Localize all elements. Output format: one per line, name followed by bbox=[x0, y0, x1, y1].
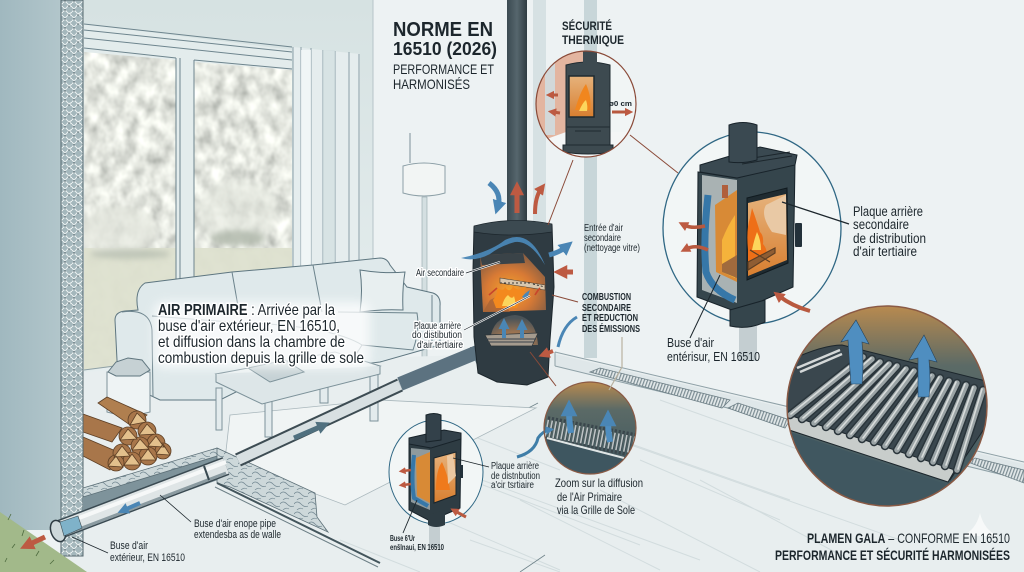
leader: émissions to small grate bbox=[609, 337, 622, 390]
title: 16510 (2026) bbox=[393, 39, 497, 59]
arrow: red inlet bbox=[562, 270, 573, 274]
rug bbox=[225, 400, 536, 505]
label: buse mini stove: Buse 6'Ur bbox=[390, 533, 415, 543]
curtain bbox=[293, 47, 360, 360]
arrow: hot air curve bbox=[535, 189, 541, 214]
grey pipe under stove bbox=[739, 326, 757, 361]
handle bbox=[795, 223, 802, 247]
window with garden bbox=[80, 24, 294, 380]
distance label: ø0 cm bbox=[609, 99, 632, 108]
pipe stub bbox=[729, 122, 757, 163]
floor bbox=[60, 352, 1024, 572]
ash chamber dome bbox=[490, 315, 538, 345]
text: air primaire: combustion depuis la grille de sole bbox=[158, 350, 364, 367]
panel: large stove cut-away inset bbox=[663, 122, 849, 361]
columns behind the stove bbox=[533, 0, 597, 358]
label: plaque arrière large inset: d'air tertiaire bbox=[853, 244, 917, 259]
panel: thermal safety inset bbox=[530, 50, 640, 160]
arrow: heat left 1 bbox=[551, 94, 558, 96]
label: combustion secondaire: DES ÉMISSIONS bbox=[582, 322, 640, 335]
front window bbox=[747, 188, 788, 280]
main stove bbox=[461, 220, 554, 385]
floor air pipe to stove bbox=[238, 347, 499, 460]
label: combustion secondaire bbox=[582, 291, 640, 335]
room back wall bbox=[82, 0, 373, 372]
top plate bbox=[700, 147, 797, 178]
label: air secondaire: Air secondaire bbox=[416, 268, 464, 279]
label: zoom grille de sole: de l'Air Primaire bbox=[557, 490, 622, 504]
arrow: air out 2 bbox=[686, 247, 708, 250]
arrow: inlet bbox=[779, 296, 810, 311]
title: HARMONISÉS bbox=[393, 76, 470, 92]
small arrow left bbox=[569, 410, 571, 433]
label: plaque mini stove bbox=[491, 461, 540, 491]
title bbox=[393, 19, 497, 92]
arrow: flue up bbox=[514, 190, 520, 213]
label: pipe: Buse d'air enope pipe bbox=[194, 518, 276, 530]
text: air primaire: et diffusion dans la chambre de bbox=[158, 334, 345, 351]
leader: buse bbox=[690, 275, 720, 338]
label: buse d'air large inset bbox=[667, 336, 760, 364]
panel: small grate zoom bbox=[517, 382, 640, 480]
label: zoom grille de sole: via la Grille de Sole bbox=[557, 503, 635, 517]
small arrow right bbox=[608, 420, 610, 442]
arrow: lower red bbox=[545, 351, 553, 354]
label: air secondaire bbox=[416, 262, 500, 279]
connector lines bbox=[530, 135, 678, 386]
title: PERFORMANCE ET bbox=[393, 61, 494, 77]
heading: thermal safety: SÉCURITÉ bbox=[562, 18, 612, 33]
label: buse d'air extérieur: Buse d'air bbox=[110, 540, 148, 552]
title: NORME EN bbox=[393, 19, 493, 41]
arrow: air down to stove bbox=[489, 183, 499, 206]
label: plaque arrière main stove: d'air tertiaire bbox=[417, 340, 463, 351]
label: plaque arrière large inset bbox=[853, 204, 926, 259]
label: plaque mini stove: Plaque arrière bbox=[491, 461, 539, 472]
leader: plaque bbox=[782, 202, 849, 224]
sole grate bbox=[485, 333, 538, 346]
arrow: mini inlet bbox=[455, 511, 466, 517]
text: air primaire: buse d'air extérieur, EN 16510, bbox=[158, 318, 340, 335]
arrow: flow in floor pipe bbox=[294, 426, 322, 438]
heading: thermal safety: THERMIQUE bbox=[562, 33, 624, 47]
label: plaque arrière large inset: secondaire bbox=[853, 217, 909, 232]
arrow: heat left 2 bbox=[553, 112, 560, 113]
flue pipe bbox=[507, 0, 527, 226]
label: plaque arrière main stove: Plaque arrière bbox=[414, 321, 461, 332]
text: air primaire bbox=[154, 302, 370, 368]
arrow: mini out 1 bbox=[403, 470, 411, 471]
label: plaque arrière large inset: de distribution bbox=[853, 231, 926, 246]
label: buse d'air large inset: Buse d'air bbox=[667, 336, 714, 350]
flames bbox=[493, 286, 526, 308]
label: zoom grille de sole: Zoom sur la diffusion bbox=[555, 476, 643, 490]
secondary air swoop bbox=[461, 237, 545, 265]
label: pipe: extendesba as de walle bbox=[194, 529, 281, 541]
label: plaque mini stove: a'cir tsrtiaire bbox=[491, 480, 534, 491]
exterior wall bbox=[0, 0, 61, 530]
panel: large grate zoom bbox=[780, 306, 990, 520]
side cut-away bbox=[702, 175, 737, 303]
basket of stones bbox=[107, 358, 150, 415]
footer caption bbox=[775, 530, 1010, 563]
label: buse d'air large inset: entérisur, EN 16510 bbox=[667, 350, 760, 364]
label: buse mini stove: enšlnaui, EN 16510 bbox=[390, 542, 444, 552]
label: pipe bbox=[160, 495, 281, 541]
mini leaders bbox=[403, 458, 489, 533]
floor trench cut-away bbox=[83, 448, 380, 567]
side inlet arrow bbox=[517, 430, 549, 457]
firebox bbox=[480, 253, 546, 312]
text: air primaire: AIR PRIMAIRE : Arrivée par la bbox=[158, 302, 335, 319]
label: entrée d'air secondaire bbox=[584, 223, 640, 254]
label: zoom grille de sole bbox=[555, 476, 643, 517]
air arrow up right bbox=[520, 326, 524, 338]
big arrow left bbox=[841, 320, 869, 384]
arrow: secondary inlet blue bbox=[549, 247, 566, 255]
floor lamp bbox=[403, 133, 445, 360]
underground air pipe bbox=[48, 462, 226, 544]
flames bbox=[747, 208, 767, 262]
label: entrée d'air secondaire: (nettoyage vitre) bbox=[584, 243, 640, 254]
collar bbox=[730, 300, 765, 327]
heading: thermal safety bbox=[562, 18, 624, 47]
firewood stack bbox=[83, 397, 171, 471]
arrow: flow in buried pipe bbox=[124, 503, 140, 510]
label: entrée d'air secondaire: Entrée d'air bbox=[584, 223, 624, 234]
panel: mini stove inset bbox=[389, 414, 489, 548]
arrow: lower blue curve bbox=[558, 317, 577, 347]
label: plaque arrière main stove bbox=[412, 296, 530, 351]
label: buse d'air extérieur bbox=[72, 537, 185, 564]
sofa pillow bbox=[360, 270, 405, 312]
label: plaque arrière main stove: do distibution bbox=[412, 330, 462, 341]
label: combustion secondaire: SECONDAIRE bbox=[582, 302, 631, 314]
label: combustion secondaire: ET REDUCTION bbox=[582, 312, 638, 324]
label: entrée d'air secondaire: secondaire bbox=[584, 233, 621, 244]
label: buse mini stove bbox=[390, 533, 444, 552]
label: plaque mini stove: de distnbution bbox=[491, 471, 540, 482]
arrow: outdoor air bbox=[28, 537, 45, 545]
label: plaque arrière large inset: Plaque arrière bbox=[853, 204, 923, 219]
arrow: clearance double bbox=[612, 110, 628, 114]
sofa bbox=[115, 258, 440, 400]
label: combustion secondaire: COMBUSTION bbox=[582, 291, 631, 303]
big arrow right bbox=[909, 335, 937, 397]
stove body bbox=[697, 163, 795, 312]
wall insulation bbox=[61, 0, 83, 556]
arrow: air out 1 bbox=[684, 225, 705, 227]
watermark bbox=[962, 513, 998, 536]
arrow: mini out 2 bbox=[403, 484, 411, 485]
coffee table bbox=[216, 352, 380, 437]
air arrow up left bbox=[502, 325, 506, 338]
grass bbox=[0, 512, 87, 572]
label: buse d'air extérieur: extérieur, EN 16510 bbox=[110, 552, 185, 564]
